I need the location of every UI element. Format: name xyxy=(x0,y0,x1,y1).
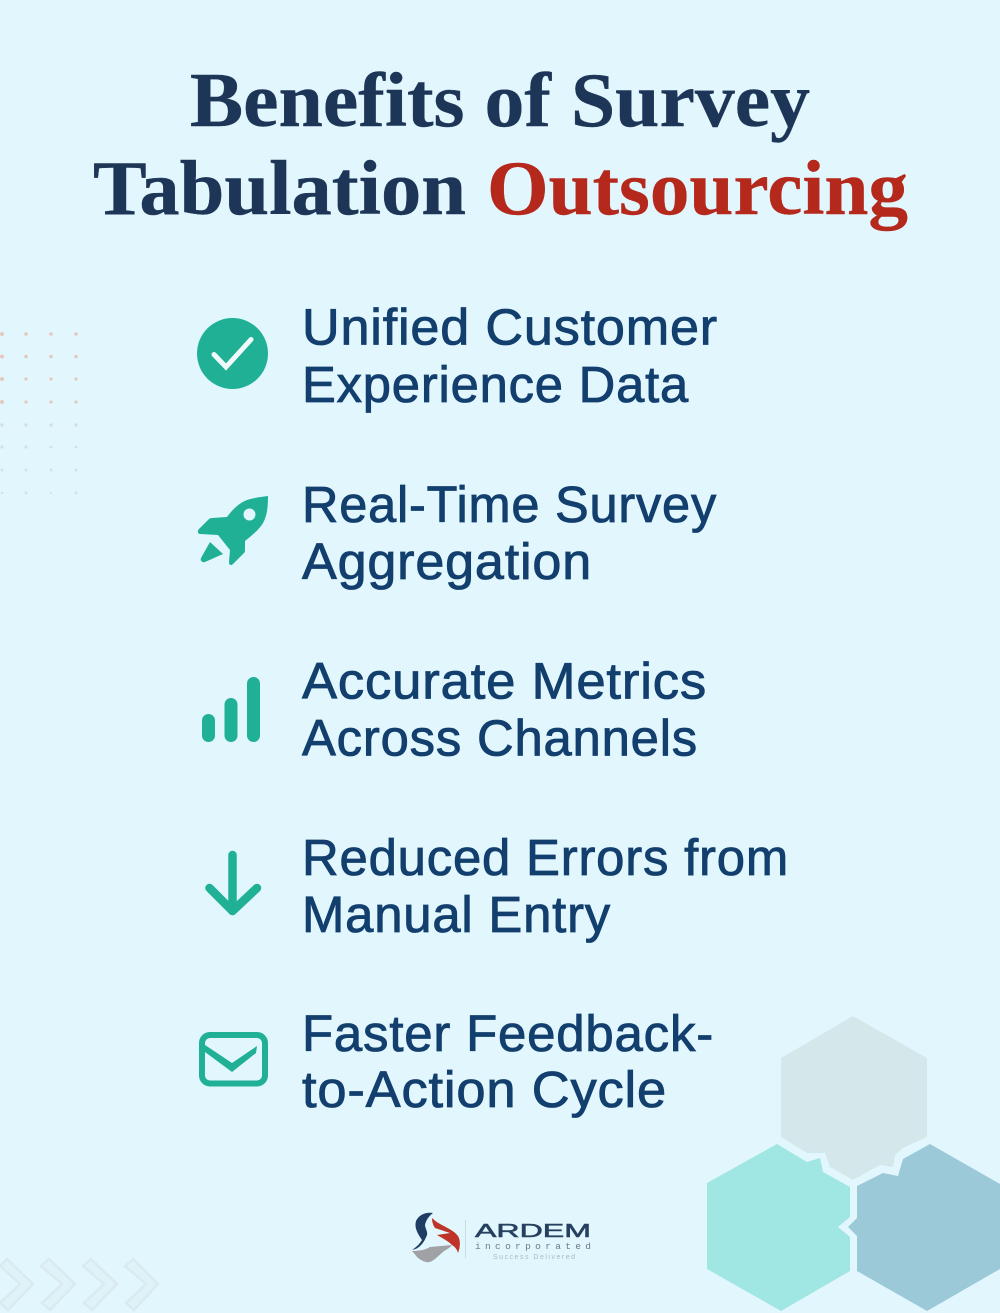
benefit: reduced errors from manual entry: Reduced Errors from xyxy=(302,829,789,886)
title: Tabulation xyxy=(93,145,466,231)
icon: rocket xyxy=(198,496,268,565)
hexagon cluster xyxy=(707,1016,1000,1311)
benefit: faster feedback-to-action cycle: Faster Feedback- xyxy=(302,1005,714,1062)
benefit: faster feedback-to-action cycle: to-Action Cycle xyxy=(302,1061,667,1118)
benefit: real-time survey aggregation: Aggregation xyxy=(302,533,592,590)
benefit: real-time survey aggregation: Real-Time Survey xyxy=(302,476,717,533)
benefit: real-time survey aggregation xyxy=(302,476,717,590)
icon: down arrow xyxy=(210,855,257,911)
benefit: reduced errors from manual entry: Manual Entry xyxy=(302,886,611,943)
title: Outsourcing xyxy=(487,145,908,231)
benefit: accurate metrics across channels xyxy=(302,652,707,766)
benefit: reduced errors from manual entry xyxy=(302,829,789,943)
icon: check circle xyxy=(197,318,268,389)
logo: ARDEM Incorporated xyxy=(412,1213,591,1262)
benefit: accurate metrics across channels: Across Channels xyxy=(302,710,698,766)
benefit: unified customer experience data xyxy=(302,298,718,413)
logo: ARDEM Incorporated: Success Delivered xyxy=(493,1254,575,1261)
title xyxy=(93,57,908,231)
chevron arrows xyxy=(0,1259,158,1310)
benefit: unified customer experience data: Unified Customer xyxy=(302,298,718,356)
dot grid decoration xyxy=(0,332,78,494)
benefit: accurate metrics across channels: Accurate Metrics xyxy=(302,652,707,710)
logo: ARDEM Incorporated: ARDEM xyxy=(475,1221,591,1241)
icon: bar chart xyxy=(202,677,260,742)
benefit: faster feedback-to-action cycle xyxy=(302,1005,714,1118)
icon: envelope xyxy=(202,1035,265,1084)
benefit: unified customer experience data: Experience Data xyxy=(302,356,689,413)
title: Benefits of Survey xyxy=(190,57,810,143)
logo: ARDEM Incorporated: incorporated xyxy=(475,1241,591,1252)
